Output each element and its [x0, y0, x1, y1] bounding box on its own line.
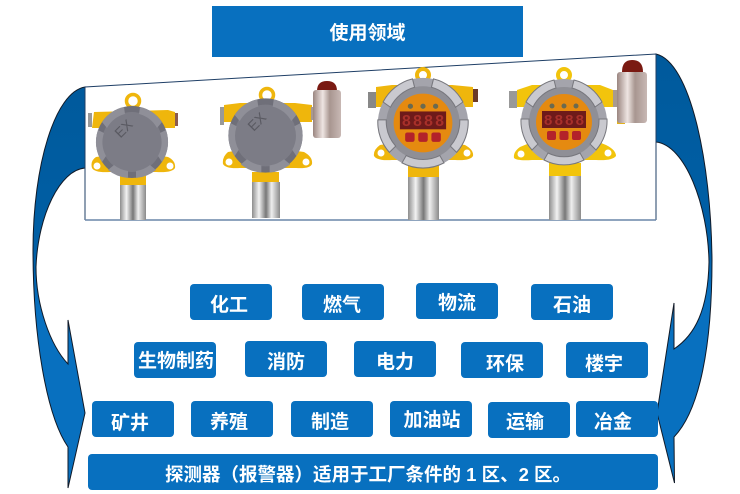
button: 燃气: 燃气: [323, 295, 361, 316]
button: 物流: 物流: [438, 293, 476, 314]
detector 1: grey housing: [88, 94, 178, 220]
product photo panel: [85, 54, 656, 220]
button: 制造: 制造: [311, 412, 349, 433]
detector 4: digital display with beacon: [509, 69, 619, 220]
title: [212, 6, 523, 57]
button: 运输: 运输: [506, 412, 544, 433]
button: 电力: [354, 341, 436, 377]
button: 电力: 电力: [376, 352, 414, 373]
button: 加油站: [390, 401, 472, 437]
button: 环保: [461, 342, 543, 378]
beacon 4: [617, 60, 647, 124]
button: 养殖: 养殖: [210, 412, 248, 433]
button: 石油: 石油: [553, 295, 591, 316]
button: 楼宇: 楼宇: [585, 354, 623, 375]
arrow: left curved: [33, 87, 85, 488]
button: 楼宇: [566, 342, 648, 378]
button: 生物制药: 生物制药: [138, 351, 214, 372]
footer bar: 探测器（报警器）适用于工厂条件的 1 区、2 区。: [165, 464, 571, 485]
button: 消防: 消防: [267, 352, 305, 373]
detector 2: grey housing with beacon: [220, 88, 317, 218]
button: 消防: [245, 341, 327, 377]
button: 冶金: [576, 401, 658, 437]
button: 制造: [291, 401, 373, 437]
button: 物流: [416, 283, 498, 319]
title: 使用领域: [329, 23, 406, 44]
button: 生物制药: [134, 342, 216, 378]
button: 养殖: [191, 401, 273, 437]
button: 石油: [531, 284, 613, 320]
button: 加油站: 加油站: [403, 410, 460, 431]
detector 3: digital display: [368, 69, 478, 220]
button: 矿井: 矿井: [111, 413, 149, 434]
button: 燃气: [302, 284, 384, 320]
arrow: right curved: [656, 54, 712, 483]
button: 环保: 环保: [486, 354, 524, 375]
button: 冶金: 冶金: [594, 412, 632, 433]
button: 化工: [190, 284, 272, 320]
button: 运输: [488, 402, 570, 438]
button: 矿井: [92, 401, 174, 437]
beacon 2: [313, 81, 341, 138]
footer bar: [88, 454, 658, 490]
button: 化工: 化工: [210, 295, 248, 316]
